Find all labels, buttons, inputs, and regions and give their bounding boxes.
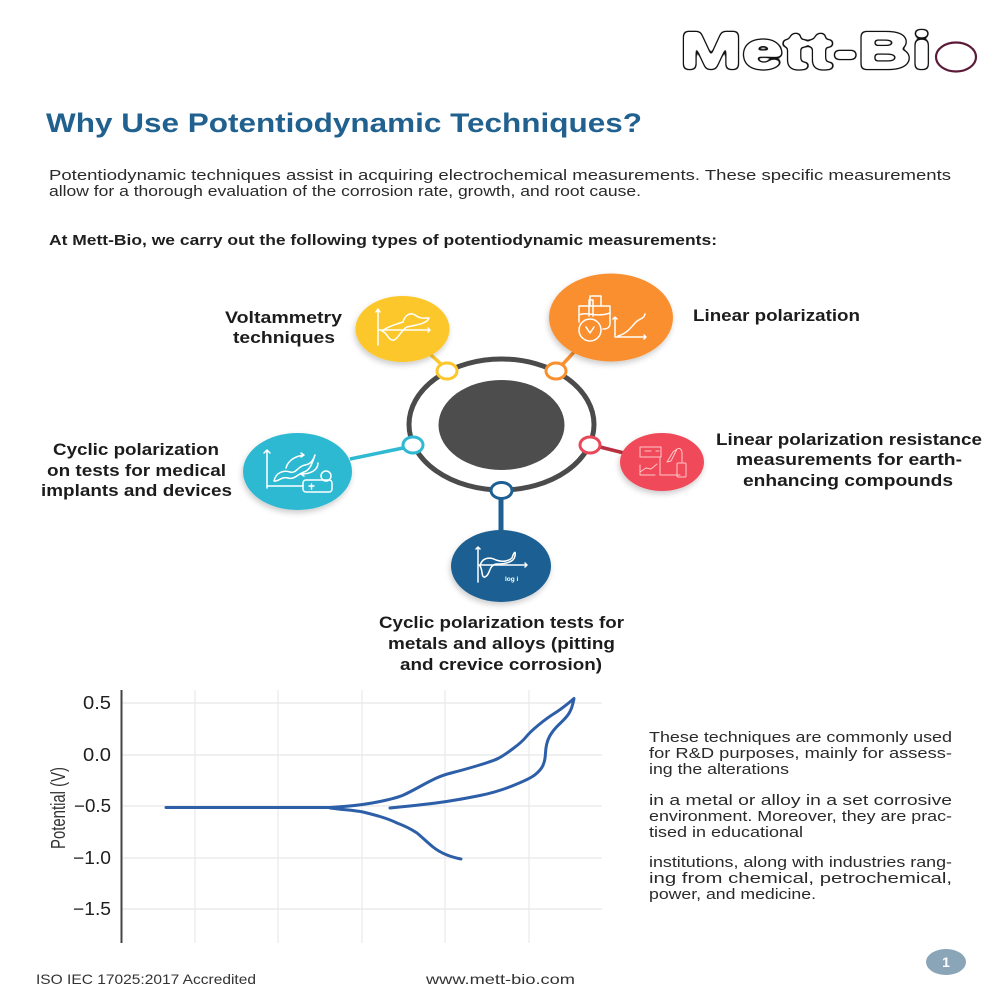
connector and node: cyclic metals [491,482,512,532]
y axis tick labels: −1.5 [73,899,111,919]
page number badge: 1 [942,954,950,970]
side paragraph: These techniques are commonly used [649,729,952,746]
side paragraph: tised in educational [649,824,803,841]
label: LPR: measurements for earth- [736,451,962,469]
side paragraph: ing the alterations [649,761,789,778]
label: cyclic metals: metals and alloys (pitting [388,635,615,653]
y axis tick labels: 0.0 [83,745,111,765]
label: linear polarization: Linear polarization [693,307,860,325]
bubble: cyclic metals: log i [505,576,519,583]
side paragraph: in a metal or alloy in a set corrosive [649,792,952,809]
label: LPR: Linear polarization resistance [716,431,982,449]
y axis tick labels: 0.5 [83,693,111,713]
bubble: LPR [620,433,704,491]
y axis tick labels [73,693,111,919]
icon: curves and battery [264,450,332,492]
connector and node: linear polarization [546,350,576,379]
label: voltammetry: techniques [233,329,335,347]
footer: accreditation: ISO IEC 17025:2017 Accredited [36,971,256,987]
side paragraph: environment. Moreover, they are prac- [649,808,952,825]
central ring diagram [409,359,594,490]
logo: Mett-Bio: Mett-Bi [680,22,932,79]
title: Why Use Potentiodynamic Techniques? [46,108,642,138]
label: cyclic medical [41,441,232,500]
intro paragraph [49,167,951,200]
y axis tick labels: −1.0 [73,848,111,868]
side paragraph [649,729,952,903]
y axis title: Potential (V) [48,767,70,849]
label: cyclic medical: implants and devices [41,482,232,500]
y axis tick labels: −0.5 [74,796,111,816]
subheading: At Mett-Bio, we carry out the following types of potentiodynamic measurements: [49,232,717,249]
connector and node: LPR [580,437,624,453]
bubble: linear polarization [549,274,673,362]
icon: instruments [640,447,686,477]
label: cyclic metals: and crevice corrosion) [400,656,602,674]
label: cyclic medical: on tests for medical [47,462,226,480]
intro paragraph: allow for a thorough evaluation of the corrosion rate, growth, and root cause. [49,183,641,200]
label: voltammetry: Voltammetry [225,309,343,327]
curve [166,698,574,808]
label: cyclic metals: Cyclic polarization tests for [379,614,625,632]
icon: voltammogram [376,309,430,345]
bubble: cyclic metals [451,530,551,602]
icon: log i plot [476,547,527,582]
page number badge [926,949,966,975]
side paragraph: for R&D purposes, mainly for assess- [649,745,952,762]
intro paragraph: Potentiodynamic techniques assist in acquiring electrochemical measurements. These specific measurements [49,167,951,184]
side paragraph: ing from chemical, petrochemical, [649,870,952,887]
footer: website: www.mett-bio.com [425,971,575,987]
chart: potentiodynamic curve [48,690,602,943]
side paragraph: institutions, along with industries rang- [649,854,952,871]
label: cyclic metals [379,614,625,674]
label: LPR [716,431,982,490]
label: voltammetry [225,309,343,347]
icon: cell and curve [579,296,646,341]
label: cyclic medical: Cyclic polarization [53,441,219,459]
side paragraph: power, and medicine. [649,886,816,903]
connector and node: cyclic medical [350,437,423,459]
label: LPR: enhancing compounds [743,472,953,490]
connector and node: voltammetry [430,354,457,379]
logo: Mett-Bio [680,22,976,79]
bubble: voltammetry [356,296,450,362]
bubble: cyclic medical [243,433,352,510]
